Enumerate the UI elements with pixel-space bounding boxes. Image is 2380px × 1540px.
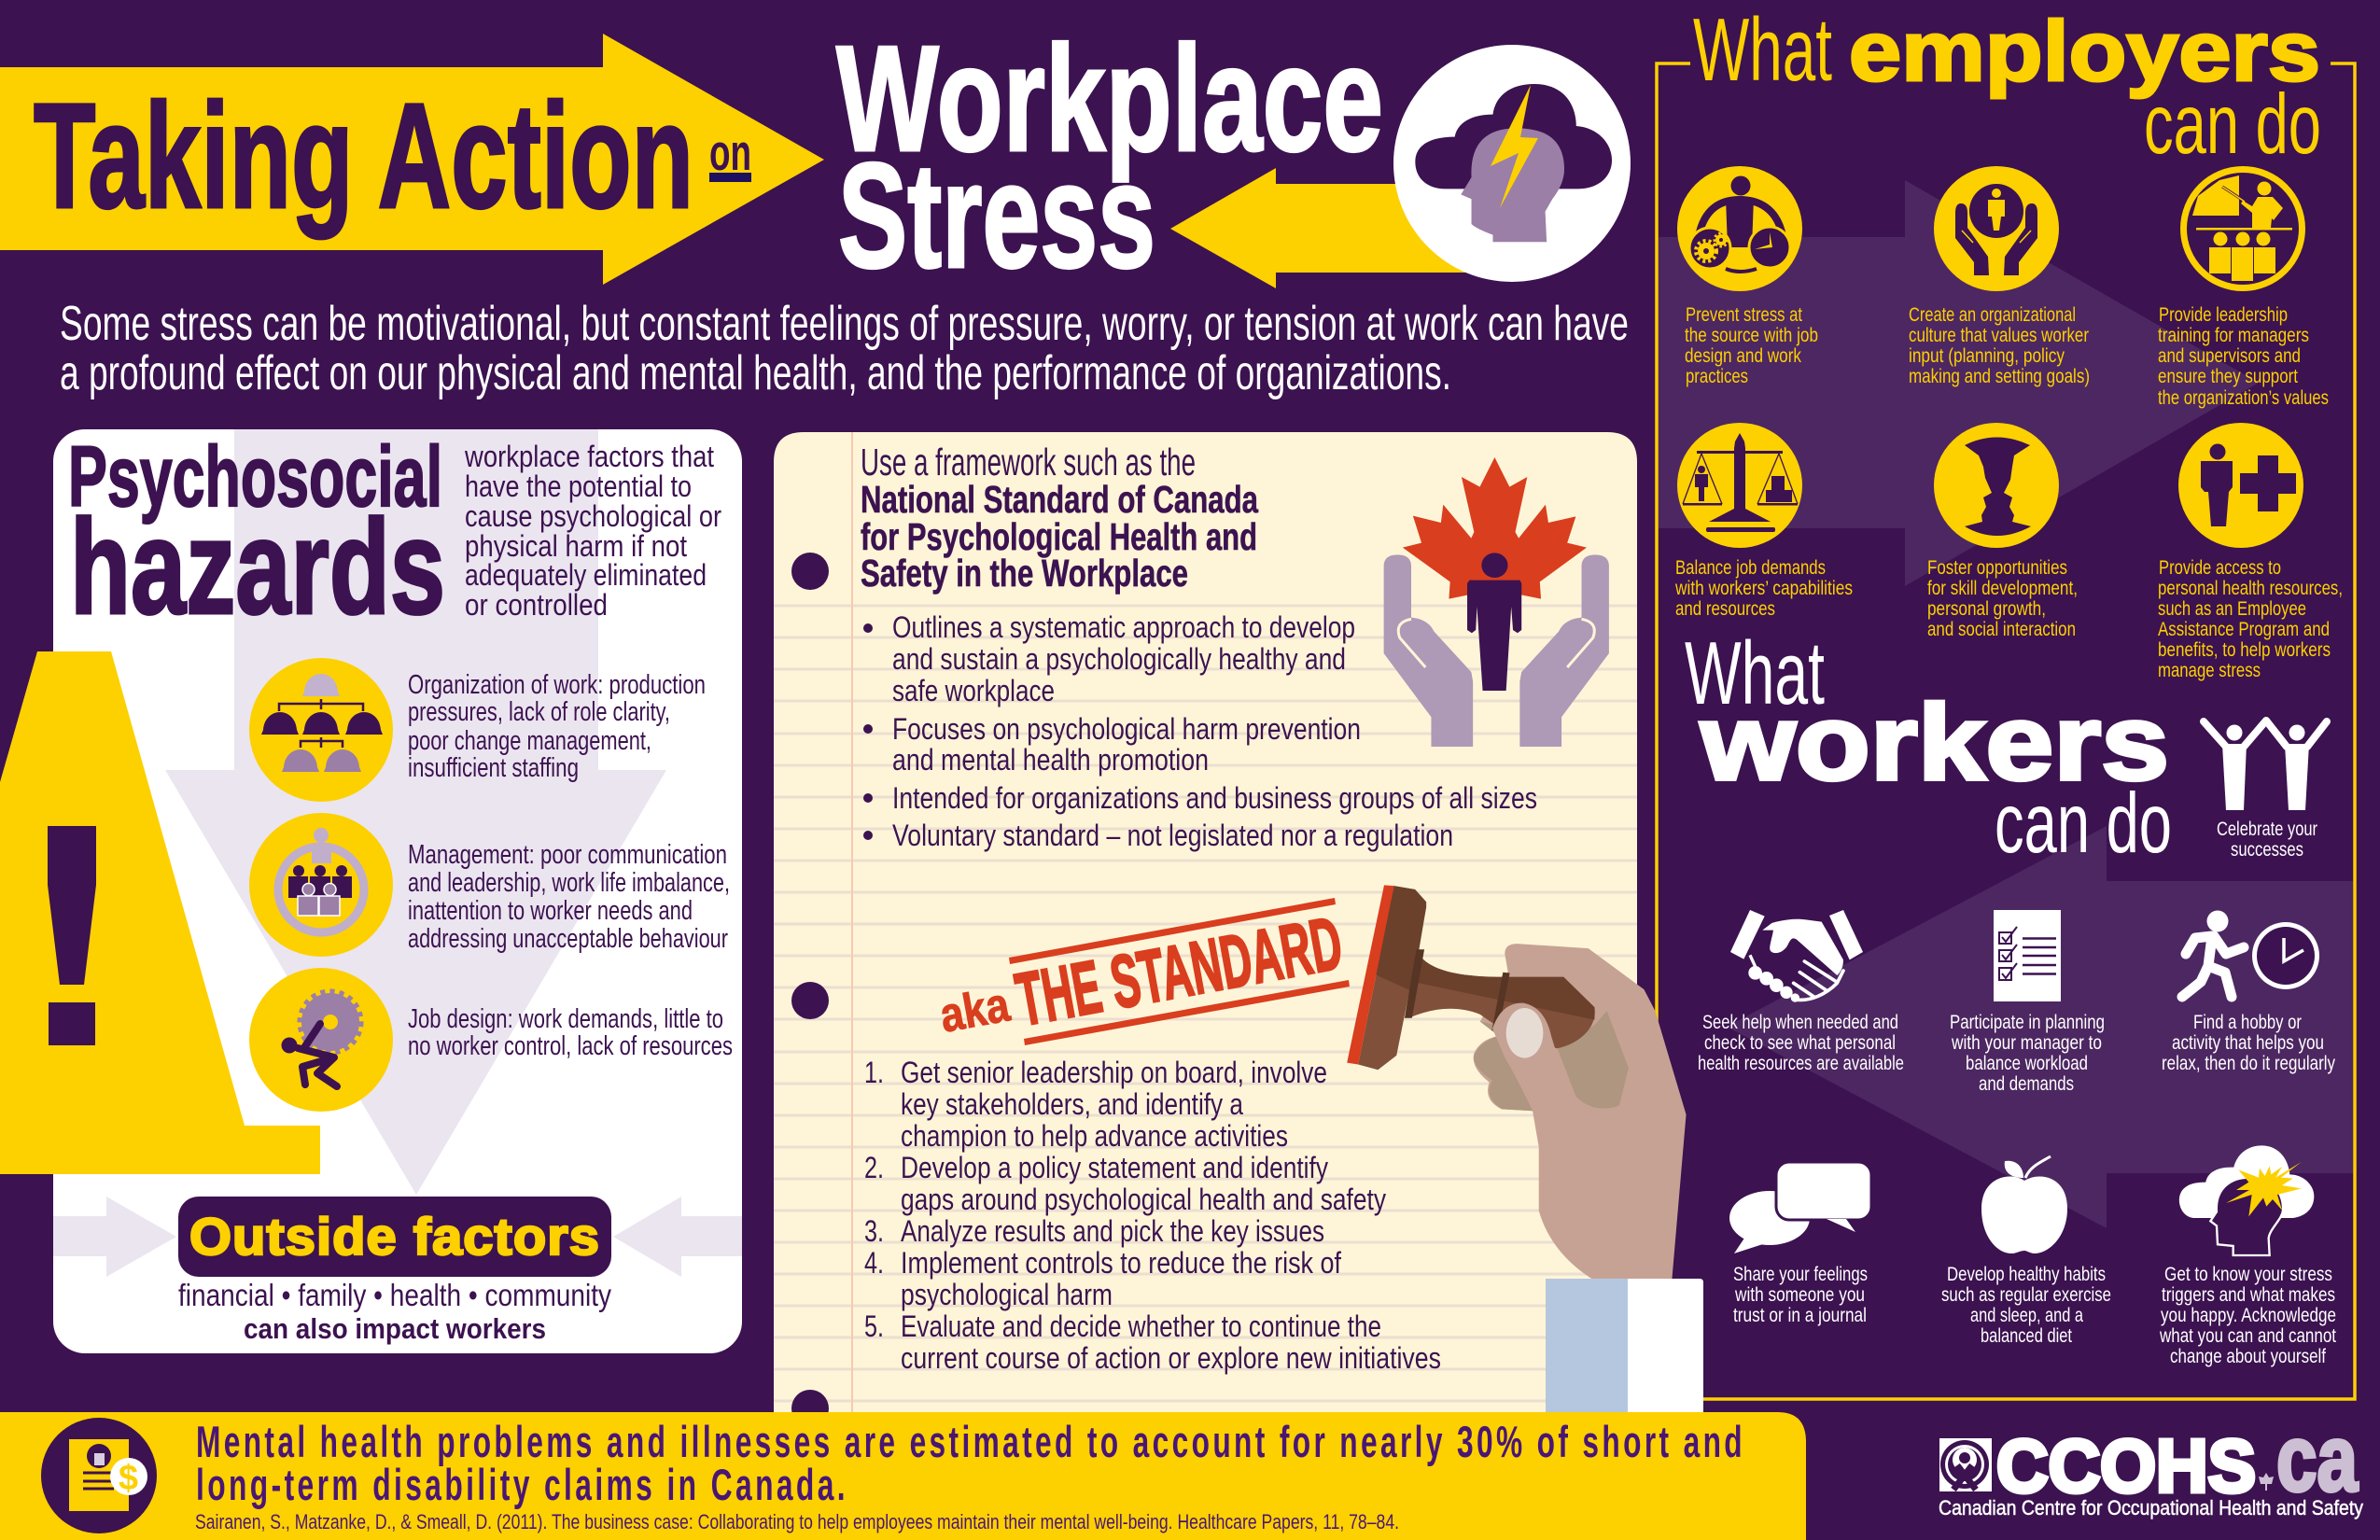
definition text: or controlled	[465, 588, 608, 622]
text: balance job demands: and resources	[1675, 598, 1775, 620]
bullet list: and sustain a psychologically healthy and	[892, 642, 1346, 676]
text: seek help: check to see what personal	[1704, 1032, 1896, 1054]
text: leadership training: Provide leadership	[2159, 304, 2288, 326]
intro text	[60, 297, 1629, 400]
text: balance job demands	[1674, 557, 1853, 620]
icon: runner and clock	[2182, 911, 2319, 997]
text: healthy habits: and sleep, and a	[1970, 1305, 2083, 1326]
text: outside factor list: can also impact workers	[244, 1312, 546, 1345]
heading: what employers can do: What	[1693, 0, 1832, 100]
icon: person with gear and clock	[1677, 166, 1802, 291]
text: participate: with your manager to	[1951, 1032, 2102, 1054]
icon: stressed head in cloud	[1393, 45, 1631, 282]
text: prevent stress: Prevent stress at	[1686, 304, 1802, 326]
bullet list: safe workplace	[892, 674, 1055, 707]
text: balance job demands: with workers’ capabilities	[1674, 578, 1853, 599]
title: Workplace Stress	[836, 15, 1383, 299]
text: personal health resources: Assistance Program and	[2158, 619, 2330, 640]
text: organization of work: poor change management,	[408, 726, 651, 756]
text: stress triggers: Get to know your stress	[2164, 1264, 2332, 1285]
text: management	[408, 840, 730, 954]
numbered list: 1.	[864, 1056, 884, 1089]
stamp mark: aka THE STANDARD: THE STANDARD	[1010, 901, 1348, 1042]
text: organizational culture: Create an organizational	[1909, 304, 2076, 326]
icon: warning triangle	[0, 651, 320, 1174]
title arrow: Taking Action on	[0, 34, 824, 285]
text: personal health resources: such as an Employee	[2158, 598, 2306, 620]
intro text: a profound effect on our physical and mental health, and the performance of organizations.	[60, 346, 1451, 400]
text: hobby: Find a hobby or	[2193, 1012, 2302, 1033]
text: job design: no worker control, lack of resources	[408, 1031, 733, 1061]
icon: leadership training	[2180, 166, 2305, 291]
text: organization of work: insufficient staffing	[408, 753, 579, 783]
icon: hands holding maple leaf and person	[1384, 457, 1609, 747]
icon: hands holding person	[1934, 166, 2059, 291]
text: foster opportunities	[1927, 557, 2078, 640]
text: personal health resources	[2158, 557, 2343, 681]
panel: what employers can do	[1657, 0, 2355, 1399]
background arrow right	[1659, 180, 2259, 586]
text: share: trust or in a journal	[1733, 1305, 1867, 1326]
stamp mark: aka THE STANDARD	[936, 898, 1350, 1045]
numbered list	[864, 1056, 1441, 1375]
icon: handshake	[1730, 910, 1863, 1002]
text: organization of work: Organization of work: production	[408, 670, 706, 700]
numbered list: 5.	[864, 1309, 884, 1343]
text: organizational culture: making and setting goals)	[1909, 366, 2090, 387]
icon: two faces	[1934, 423, 2059, 548]
numbered list: 4.	[864, 1246, 884, 1280]
heading: framework	[861, 441, 1259, 595]
icon: person and health cross	[2178, 423, 2303, 548]
heading: framework: for Psychological Health and	[861, 515, 1257, 558]
numbered list: Implement controls to reduce the risk of	[901, 1246, 1341, 1280]
definition text: physical harm if not	[465, 529, 687, 563]
heading: what workers can do: workers	[1700, 683, 2169, 803]
bullet list: Outlines a systematic approach to develop	[892, 610, 1355, 644]
icon: organization hard hats	[249, 658, 393, 802]
logo: CCOHS.ca: CCOHS	[1996, 1424, 2256, 1507]
text: leadership training: ensure they support	[2158, 366, 2298, 387]
text: celebrate: successes	[2231, 839, 2303, 861]
title: Workplace Stress: Stress	[838, 132, 1155, 299]
text: prevent stress: design and work	[1685, 345, 1801, 367]
panel: notebook paper	[774, 432, 1637, 1427]
numbered list: Get senior leadership on board, involve	[901, 1056, 1327, 1089]
background arrow left	[1727, 826, 2353, 1228]
text: organizational culture: culture that values worker	[1909, 325, 2089, 346]
background down arrow	[165, 429, 666, 1195]
icon: management group	[249, 813, 393, 957]
numbered list: Develop a policy statement and identify	[901, 1151, 1328, 1184]
text: organizational culture	[1909, 304, 2090, 387]
heading: framework: Safety in the Workplace	[861, 552, 1188, 595]
numbered list: Analyze results and pick the key issues	[901, 1214, 1324, 1248]
logo: CCOHS.ca: ca	[2276, 1407, 2359, 1511]
title arrow: Taking Action on: on	[709, 123, 751, 181]
numbered list: champion to help advance activities	[901, 1119, 1288, 1153]
icon: hand holding stamp	[1347, 885, 1703, 1413]
text: seek help	[1698, 1012, 1904, 1074]
heading: framework: Use a framework such as the	[861, 441, 1196, 483]
numbered list: psychological harm	[901, 1278, 1113, 1311]
definition text: cause psychological or	[465, 499, 721, 533]
text: healthy habits: balanced diet	[1981, 1325, 2072, 1347]
definition text: have the potential to	[465, 469, 692, 503]
text: personal health resources: benefits, to help workers	[2158, 639, 2331, 661]
text: stress triggers	[2159, 1264, 2336, 1367]
arrow pointing left to title	[1170, 168, 1531, 288]
text: management: addressing unacceptable behaviour	[408, 924, 728, 954]
text: share: Share your feelings	[1733, 1264, 1868, 1285]
text: job design: Job design: work demands, little to	[408, 1004, 723, 1034]
icon: document and dollar: $	[119, 1459, 138, 1498]
text: participate: and demands	[1979, 1073, 2074, 1095]
numbered list: current course of action or explore new initiatives	[901, 1341, 1441, 1375]
heading: framework: National Standard of Canada	[861, 478, 1259, 521]
heading: what workers can do	[1685, 623, 2172, 871]
text: participate: balance workload	[1966, 1053, 2088, 1074]
icon: balance scales	[1677, 423, 1802, 548]
text: healthy habits: such as regular exercise	[1941, 1284, 2111, 1306]
text: prevent stress: practices	[1686, 366, 1748, 387]
bullet list: Focuses on psychological harm prevention	[892, 712, 1361, 746]
text: personal health resources: Provide access to	[2159, 557, 2281, 579]
icon: document and dollar	[41, 1418, 157, 1533]
text: hobby: activity that helps you	[2172, 1032, 2324, 1054]
heading: Psychosocial hazards: Psychosocial	[68, 429, 442, 525]
definition text	[464, 440, 721, 622]
text: disability statistic	[195, 1417, 1745, 1533]
text: foster opportunities: for skill development,	[1927, 578, 2078, 599]
text: leadership training	[2158, 304, 2329, 409]
text: management: inattention to worker needs and	[408, 896, 693, 926]
text: participate	[1950, 1012, 2105, 1095]
text: seek help: Seek help when needed and	[1702, 1012, 1898, 1033]
arrow: outside factors from right	[613, 1197, 742, 1277]
text: seek help: health resources are available	[1698, 1053, 1904, 1074]
text: healthy habits: Develop healthy habits	[1947, 1264, 2106, 1285]
callout: outside factors	[178, 1197, 611, 1277]
text: outside factor list	[178, 1278, 611, 1345]
frame	[1657, 63, 2355, 1399]
numbered list: gaps around psychological health and safety	[901, 1183, 1386, 1216]
panel: psychosocial hazards	[0, 429, 742, 1353]
text: hobby	[2162, 1012, 2335, 1074]
icon: worker carrying gear	[249, 968, 393, 1112]
callout: outside factors: Outside factors	[189, 1207, 600, 1266]
icon: checklist	[1994, 910, 2061, 1001]
heading: Psychosocial hazards: hazards	[70, 492, 445, 642]
heading: what workers can do: can do	[1995, 777, 2172, 871]
text: organization of work: pressures, lack of role clarity,	[408, 697, 670, 727]
text: disability statistic: long-term disability claims in Canada.	[196, 1460, 848, 1509]
bullet list: Intended for organizations and business groups of all sizes	[892, 781, 1537, 815]
icon: head with stress trigger	[2179, 1145, 2314, 1255]
definition text: workplace factors that	[464, 440, 714, 473]
text: organizational culture: input (planning, policy	[1909, 345, 2065, 367]
stamp mark: aka THE STANDARD: aka	[936, 977, 1015, 1043]
text: prevent stress	[1685, 304, 1818, 387]
numbered list: 2.	[864, 1151, 884, 1184]
text: balance job demands: Balance job demands	[1675, 557, 1826, 579]
text: leadership training: the organization’s values	[2158, 387, 2329, 409]
text: personal health resources: manage stress	[2158, 660, 2261, 681]
arrow: outside factors from left	[53, 1197, 176, 1277]
text: share	[1733, 1264, 1868, 1326]
text: organization of work	[408, 670, 706, 783]
text: disability statistic: Sairanen, S., Matzanke, D., & Smeall, D. (2011). The business case: Collaborating to help employees maintain their mental well-being. Healthcare Papers, 11, 78–84.	[195, 1510, 1399, 1533]
text: management: Management: poor communication	[408, 840, 727, 870]
text: job design	[408, 1004, 733, 1061]
icon: speech bubbles	[1729, 1162, 1871, 1253]
text: celebrate	[2217, 819, 2317, 861]
text: foster opportunities: Foster opportunities	[1927, 557, 2067, 579]
bullet list	[863, 610, 1537, 852]
icon: apple	[1981, 1156, 2067, 1253]
icon: celebrating workers	[2204, 721, 2327, 810]
heading: what employers can do	[1693, 0, 2321, 172]
text: stress triggers: change about yourself	[2170, 1346, 2326, 1367]
intro text: Some stress can be motivational, but constant feelings of pressure, worry, or tension at work can have	[60, 297, 1629, 351]
bullet list: and mental health promotion	[892, 743, 1209, 777]
heading: Psychosocial hazards	[68, 429, 445, 642]
text: foster opportunities: and social interaction	[1927, 619, 2076, 640]
text: healthy habits	[1941, 1264, 2111, 1347]
text: stress triggers: triggers and what makes	[2162, 1284, 2335, 1306]
title: Workplace Stress: Workplace	[836, 15, 1383, 183]
text: stress triggers: you happy. Acknowledge	[2161, 1305, 2336, 1326]
text: hobby: relax, then do it regularly	[2162, 1053, 2335, 1074]
logo: CCOHS.ca	[1939, 1407, 2363, 1519]
text: prevent stress: the source with job	[1685, 325, 1818, 346]
bullet list: Voluntary standard – not legislated nor a regulation	[892, 819, 1453, 852]
heading: what workers can do: What	[1685, 623, 1825, 723]
text: leadership training: training for managers	[2158, 325, 2309, 346]
text: participate: Participate in planning	[1950, 1012, 2105, 1033]
text: share: with someone you	[1734, 1284, 1865, 1306]
text: management: and leadership, work life imbalance,	[408, 868, 730, 898]
numbered list: 3.	[864, 1214, 884, 1248]
text: stress triggers: what you can and cannot	[2159, 1325, 2336, 1347]
heading: what employers can do: employers	[1849, 5, 2320, 99]
text: foster opportunities: personal growth,	[1927, 598, 2046, 620]
numbered list: key stakeholders, and identify a	[901, 1087, 1243, 1121]
callout: disability claims bar	[0, 1412, 1806, 1540]
title arrow: Taking Action on: Taking Action	[34, 72, 693, 239]
text: leadership training: and supervisors and	[2158, 345, 2301, 367]
text: outside factor list: financial • family • health • community	[178, 1278, 611, 1312]
numbered list: Evaluate and decide whether to continue the	[901, 1309, 1381, 1343]
definition text: adequately eliminated	[465, 558, 707, 592]
shirt cuff	[1546, 1279, 1703, 1413]
text: celebrate: Celebrate your	[2217, 819, 2317, 840]
